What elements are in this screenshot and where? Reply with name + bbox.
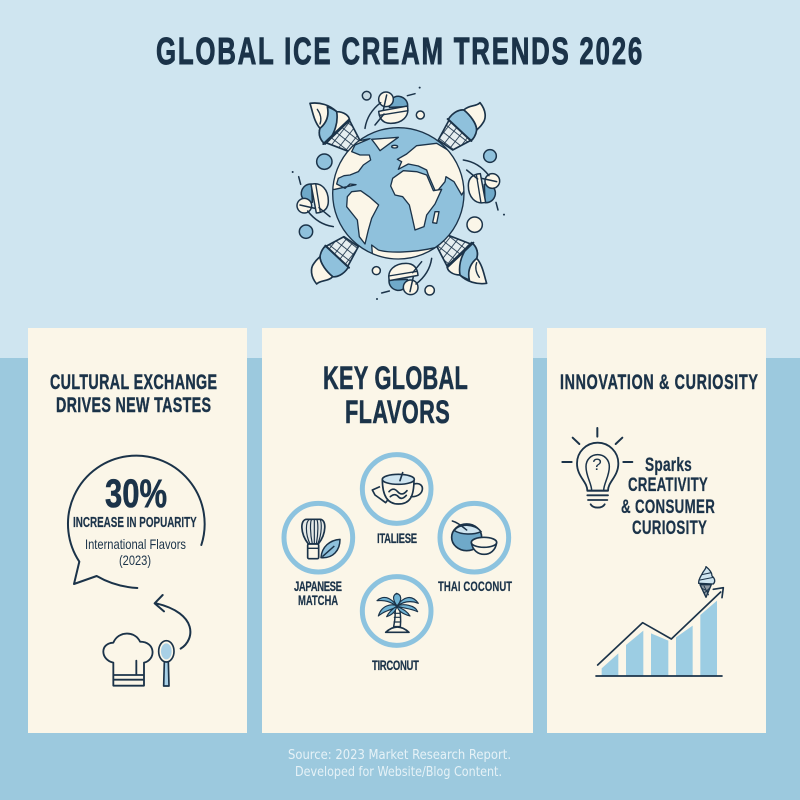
text: sparks creativity: CURIOSITY <box>632 518 707 539</box>
flavor: Japanese matcha: JAPANESE <box>294 578 342 595</box>
flavor: Japanese matcha <box>284 503 353 609</box>
text: sparks creativity <box>621 454 715 539</box>
statistic note: International Flavors <box>85 536 186 552</box>
heading: innovation and curiosity: INNOVATION & CURIOSITY <box>560 370 758 394</box>
panel: key global flavors <box>262 328 533 733</box>
flavor: Thai coconut: THAI COCONUT <box>438 578 513 595</box>
speech bubble <box>68 456 205 588</box>
heading: key global flavors <box>323 360 468 430</box>
title: GLOBAL ICE CREAM TRENDS 2026 <box>156 30 642 72</box>
icon: spoon <box>159 641 174 686</box>
arrow: curved <box>155 595 190 649</box>
heading: cultural exchange: CULTURAL EXCHANGE <box>50 370 217 394</box>
heading: key global flavors: FLAVORS <box>345 394 450 430</box>
statistic: 30%: 30% <box>105 472 167 516</box>
heading: key global flavors: KEY GLOBAL <box>323 360 468 396</box>
heading: cultural exchange <box>50 370 217 417</box>
flavor: Tirconut: TIRCONUT <box>372 657 419 674</box>
icon: ice cream cones <box>310 103 487 284</box>
flavor: Japanese matcha: MATCHA <box>298 592 338 609</box>
footer: source note <box>288 747 511 780</box>
text: sparks creativity: CREATIVITY <box>628 475 708 496</box>
panel: innovation and curiosity <box>547 328 766 733</box>
flavor: Thai coconut <box>438 503 513 595</box>
icon: light bulb <box>562 428 632 508</box>
footer: source note: Source: 2023 Market Research Report. <box>288 747 511 763</box>
footer: source note: Developed for Website/Blog Content. <box>295 764 502 780</box>
flavor: Italiese: ITALIESE <box>377 530 417 547</box>
decorative circles <box>299 91 496 295</box>
icon: chef hat <box>103 634 153 686</box>
text: sparks creativity: Sparks <box>645 454 692 476</box>
heading: cultural exchange: DRIVES NEW TASTES <box>56 393 211 417</box>
text: sparks creativity: & CONSUMER <box>621 497 715 518</box>
illustration: globe surrounded by ice creams <box>292 87 505 300</box>
statistic note: (2023) <box>119 552 151 568</box>
panel: cultural exchange <box>28 328 247 733</box>
chart: rising bars with arrow <box>596 588 723 676</box>
statistic note <box>85 536 186 568</box>
icon: small desserts <box>292 87 505 300</box>
icon: small ice cream <box>699 567 715 597</box>
icon: light bulb: ? <box>592 455 602 474</box>
icon: globe <box>332 127 465 260</box>
flavor: Italiese <box>362 455 431 547</box>
flavor: Tirconut <box>362 577 431 674</box>
statistic label: INCREASE IN POPUARITY <box>73 514 197 531</box>
